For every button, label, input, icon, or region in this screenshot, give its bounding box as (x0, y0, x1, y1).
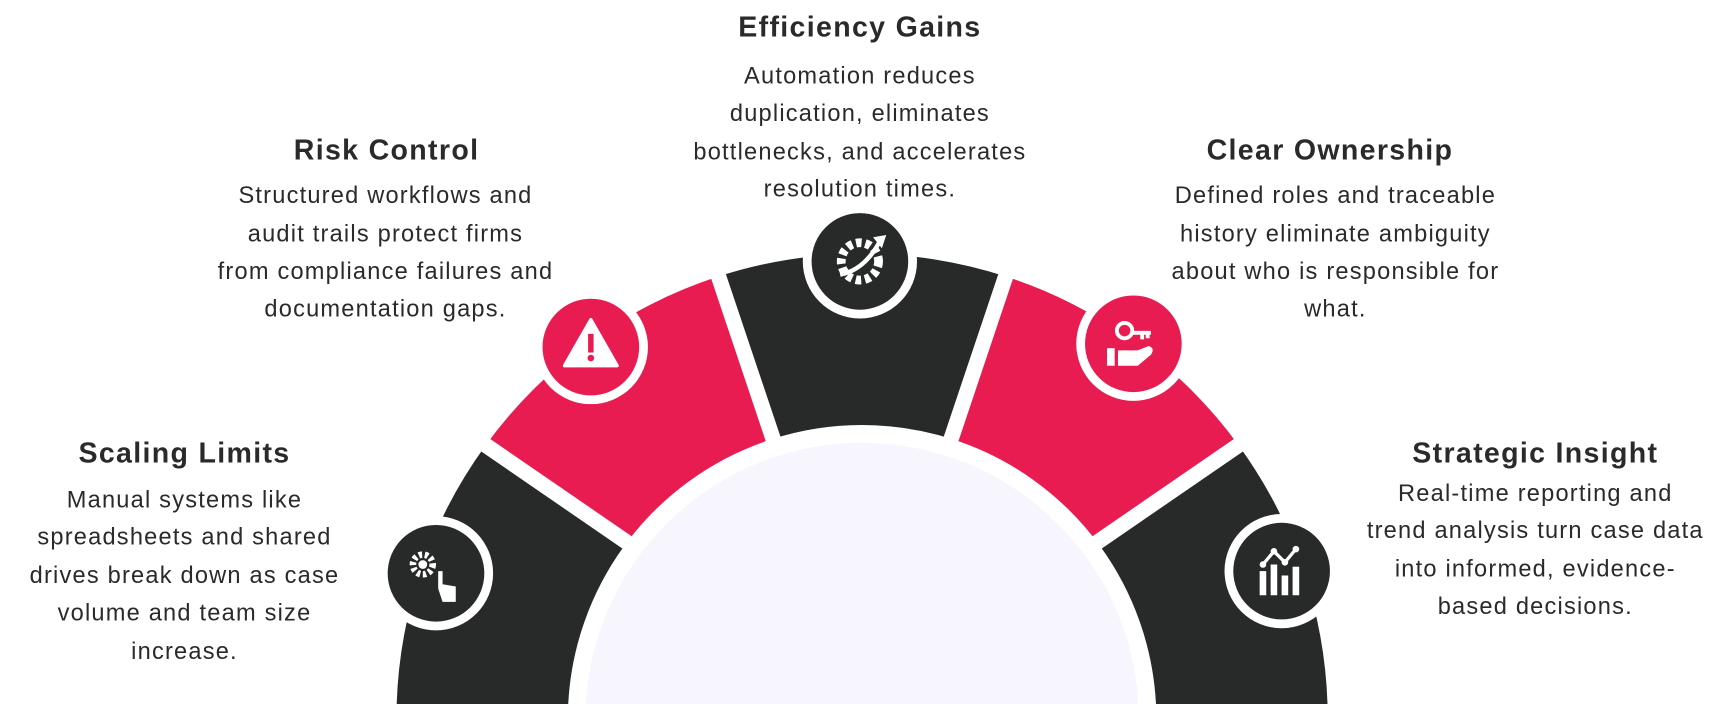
text: clear ownership: about who is responsible for (1172, 259, 1499, 285)
text: scaling limits: volume and team size (58, 601, 311, 627)
text: risk control: from compliance failures and (218, 259, 553, 285)
segment: clear ownership (953, 277, 1239, 546)
text: efficiency gains: Efficiency Gains (738, 11, 982, 43)
text: clear ownership: what. (1303, 296, 1367, 322)
segment: scaling limits (397, 446, 624, 704)
arc diagram (397, 246, 1328, 704)
text: strategic insight: into informed, evidence- (1395, 557, 1676, 583)
text: strategic insight (1367, 437, 1704, 620)
text: risk control: documentation gaps. (264, 296, 507, 322)
text: risk control: audit trails protect firms (248, 222, 523, 248)
text: clear ownership (1172, 134, 1499, 322)
text: scaling limits (30, 437, 339, 665)
text: strategic insight: based decisions. (1438, 594, 1633, 620)
text: scaling limits: increase. (131, 639, 238, 665)
icon: strategic insight chart (1225, 514, 1339, 628)
icon: risk control warning (534, 290, 648, 404)
text: efficiency gains: Automation reduces (744, 63, 976, 89)
segment: risk control (485, 277, 771, 546)
text: clear ownership: Clear Ownership (1207, 134, 1453, 166)
icon: scaling limits gear hand (379, 516, 493, 630)
text: scaling limits: Scaling Limits (79, 437, 290, 469)
text: clear ownership: Defined roles and traceable (1175, 183, 1496, 209)
text: efficiency gains (693, 11, 1026, 203)
text: scaling limits: spreadsheets and shared (37, 525, 332, 551)
text: efficiency gains: resolution times. (764, 177, 956, 203)
icon: efficiency gains gear arrow (803, 204, 917, 319)
text: strategic insight: trend analysis turn case data (1367, 518, 1704, 544)
text: strategic insight: Strategic Insight (1412, 437, 1658, 469)
text: scaling limits: drives break down as case (30, 563, 339, 589)
segment: strategic insight (1100, 446, 1328, 704)
text: scaling limits: Manual systems like (67, 487, 302, 513)
segment: efficiency gains (718, 254, 1006, 439)
text: strategic insight: Real-time reporting and (1398, 481, 1673, 507)
text: efficiency gains: bottlenecks, and accelerates (693, 139, 1026, 165)
text: risk control: Risk Control (294, 134, 479, 166)
center lavender semicircle (586, 443, 1138, 704)
text: clear ownership: history eliminate ambiguity (1180, 222, 1491, 248)
text: risk control (218, 134, 553, 322)
icon: clear ownership key hand (1076, 287, 1190, 401)
text: efficiency gains: duplication, eliminates (730, 101, 990, 127)
text: risk control: Structured workflows and (238, 183, 533, 209)
